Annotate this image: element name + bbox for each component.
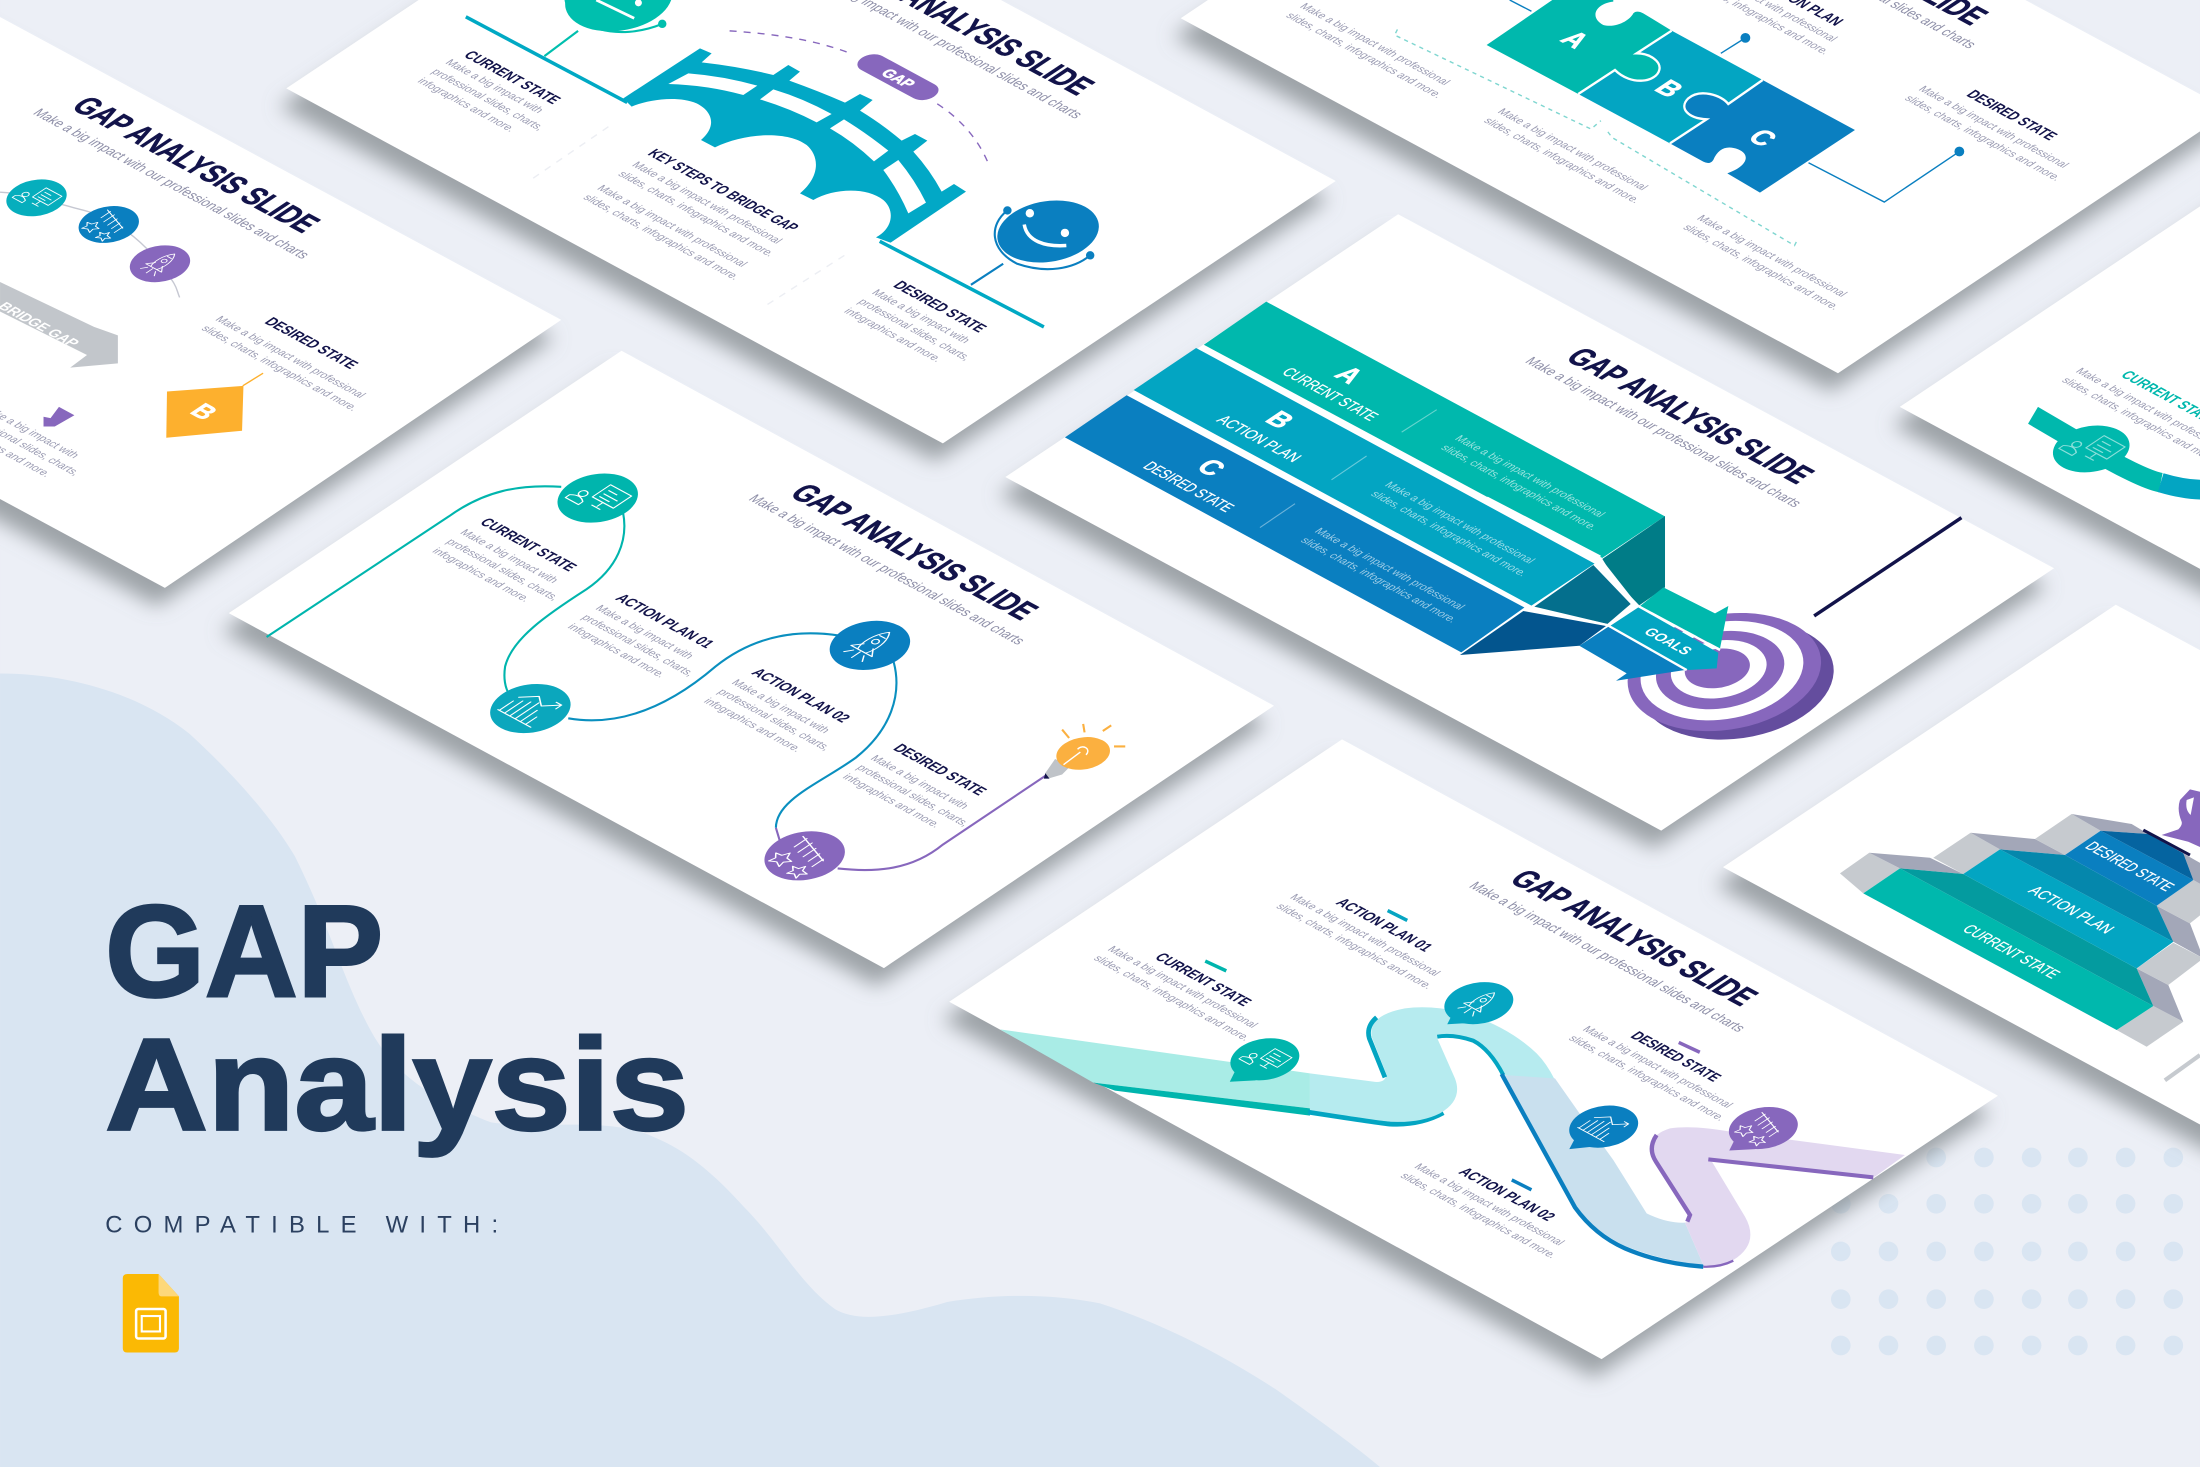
background blob xyxy=(0,673,1381,1467)
arrow heads and sides xyxy=(1460,498,1728,681)
main title: GAP xyxy=(105,878,383,1024)
icon: board circle xyxy=(2037,416,2145,482)
action plan label: ACTION PLAN xyxy=(2024,884,2117,936)
band C top xyxy=(1065,395,1524,652)
desired state text: professional slides, charts, xyxy=(853,763,972,828)
heading: current state: CURRENT STATE xyxy=(460,48,564,107)
connector dots xyxy=(1740,33,1964,156)
heading: desired state: DESIRED STATE xyxy=(889,279,990,335)
current state text: infographics and more. xyxy=(429,547,533,604)
letter B: B xyxy=(1259,407,1301,433)
heading: current state: CURRENT STATE xyxy=(476,516,580,574)
band A text: Make a big impact with professional xyxy=(1452,434,1607,519)
road band xyxy=(2033,415,2161,483)
body text three: Make a big impact with professional xyxy=(1694,214,1850,299)
panel: target slide xyxy=(999,214,2054,849)
band B text: slides, charts, infographics and more. xyxy=(1368,489,1530,579)
action plan 02 text: infographics and more. xyxy=(700,697,804,754)
connector curve xyxy=(0,192,180,297)
heading: target slide title: GAP ANALYSIS SLIDE xyxy=(1558,342,1823,489)
body text two: slides, charts, infographics and more. xyxy=(1480,116,1643,205)
connector xyxy=(243,373,263,386)
pin: current state xyxy=(1216,1030,1314,1089)
icon: stars circle xyxy=(748,821,862,890)
icon: board circle xyxy=(541,464,655,533)
panel: bridge slide xyxy=(279,0,1336,462)
dot pattern xyxy=(1831,1148,2183,1355)
desired state label: DESIRED STATE xyxy=(1139,460,1237,515)
key steps text: Make a big impact with professional xyxy=(594,184,750,269)
stairs xyxy=(1840,814,2200,1047)
current state text: Make a big impact with xyxy=(442,58,546,115)
accent dashes xyxy=(1205,961,1226,971)
icon: B diamond xyxy=(166,386,243,438)
action plan 01 text: infographics and more. xyxy=(564,622,668,680)
panel: right small slide xyxy=(1893,145,2200,779)
desired state text: Make a big impact with xyxy=(869,288,973,345)
heading: action plan 02: ACTION PLAN 02 xyxy=(1454,1165,1559,1224)
icon: board circle xyxy=(0,172,79,224)
current state label: CURRENT STATE xyxy=(1958,923,2063,981)
current state label: CURRENT STATE xyxy=(1277,366,1382,424)
winding line purple xyxy=(776,776,1045,870)
body text one: slides, charts, infographics and more. xyxy=(1283,11,1445,100)
action plan 01 text: Make a big impact with xyxy=(592,604,696,661)
gap pill xyxy=(851,51,944,104)
dividers xyxy=(1260,410,1437,528)
pin: action plan 01 xyxy=(1430,974,1528,1033)
pin: desired state xyxy=(1715,1099,1812,1158)
desired state label: DESIRED STATE xyxy=(2081,840,2178,894)
current state text: professional slides, charts, xyxy=(443,537,562,603)
gap dashed arc xyxy=(730,31,989,166)
heading: action plan 02: ACTION PLAN 02 xyxy=(747,666,854,725)
band A top xyxy=(1204,302,1665,558)
desired state text: Make a big impact with professional xyxy=(1579,1025,1735,1110)
action plan 02 text: slides, charts, infographics and more. xyxy=(1397,1171,1559,1260)
faint dashed dividers xyxy=(533,123,849,304)
icon: google slides xyxy=(123,1274,179,1353)
action plan 02 text: Make a big impact with professional xyxy=(1411,1162,1567,1247)
desired state text: Make a big impact with professional xyxy=(1915,85,2071,170)
icon: trophy xyxy=(2143,789,2200,855)
heading: desired state: DESIRED STATE xyxy=(889,742,990,798)
body text one: Make a big impact with professional xyxy=(1297,2,1452,87)
body text three: slides, charts, infographics and more. xyxy=(1680,223,1842,312)
panel: left slide with A and B states xyxy=(0,0,561,606)
heading: current state: CURRENT STATE xyxy=(1150,951,1255,1009)
panel: road slide xyxy=(942,739,1998,1378)
winding line blue xyxy=(568,633,896,828)
desired state text: Make a big impact with professional xyxy=(212,315,368,400)
heading: action plan 01: ACTION PLAN 01 xyxy=(1331,896,1436,954)
winding slide subtitle: Make a big impact with our professional slides and charts xyxy=(744,492,1028,647)
icon: stars circle xyxy=(66,199,151,250)
desired state text: slides, charts, infographics and more. xyxy=(1901,94,2064,183)
current state text: slides, charts, infographics and more. xyxy=(1090,954,1253,1043)
band A text: slides, charts, infographics and more. xyxy=(1438,443,1600,532)
icon: smiley face xyxy=(971,188,1120,285)
key steps text: Make a big impact with professional xyxy=(629,160,785,246)
key steps text: slides, charts, infographics and more. xyxy=(615,170,777,259)
road band blue xyxy=(2161,483,2200,490)
bridge xyxy=(623,48,966,243)
desired state text: professional slides, charts, xyxy=(855,297,973,363)
grey line xyxy=(2165,1055,2200,1080)
letter C: C xyxy=(1741,125,1784,151)
main title: Analysis xyxy=(105,1011,689,1157)
desired state text: infographics and more. xyxy=(839,772,943,830)
heading: desired state: DESIRED STATE xyxy=(1626,1029,1725,1084)
band B top xyxy=(1134,348,1595,606)
desired state text: slides, charts, infographics and more. xyxy=(198,324,361,413)
band C text: Make a big impact with professional xyxy=(1311,526,1467,612)
band C text: slides, charts, infographics and more. xyxy=(1297,536,1460,625)
desired state text: Make a big impact with xyxy=(867,754,971,811)
key steps text: slides, charts, infographics and more. xyxy=(580,193,742,282)
heading: desired state: DESIRED STATE xyxy=(1962,88,2061,143)
letter A: A xyxy=(1554,26,1596,53)
gap label: GAP xyxy=(877,66,919,91)
action plan 01 text: slides, charts, infographics and more. xyxy=(1273,902,1435,991)
action plan 02 text: Make a big impact with xyxy=(728,678,832,735)
icon: chart circle xyxy=(474,674,587,743)
desired state text: infographics and more. xyxy=(841,307,945,364)
action plan 02 text: professional slides, charts, xyxy=(714,687,833,753)
panel: stairs slide xyxy=(1716,605,2200,1239)
letter B: B xyxy=(184,400,223,424)
icon: rocket circle xyxy=(117,238,203,290)
heading: road slide title: GAP ANALYSIS SLIDE xyxy=(1502,864,1766,1011)
letter A: A xyxy=(1328,362,1370,388)
current state text: Make a big impact with xyxy=(457,528,561,585)
action plan label: ACTION PLAN xyxy=(1212,413,1305,465)
body text two: Make a big impact with professional xyxy=(1494,107,1650,192)
goals label: GOALS xyxy=(1639,626,1695,658)
dashed guides xyxy=(1395,29,1797,246)
winding road xyxy=(1000,1007,1905,1267)
arrow: bridge gap xyxy=(0,282,118,368)
icon: small purple arrow xyxy=(44,407,74,427)
action plan 01 text: Make a big impact with professional xyxy=(1287,893,1443,978)
current state text: professional slides, charts, xyxy=(428,67,547,133)
compatible with label: COMPATIBLE WITH: xyxy=(105,1212,498,1239)
winding line teal xyxy=(267,486,624,706)
heading: key steps: KEY STEPS TO BRIDGE GAP xyxy=(643,147,802,234)
heading: winding slide title: GAP ANALYSIS SLIDE xyxy=(782,478,1047,625)
current state text: infographics and more. xyxy=(414,77,518,134)
road slide subtitle: Make a big impact with our professional slides and charts xyxy=(1465,880,1749,1035)
connector lines xyxy=(1510,0,1959,202)
icon: rocket circle xyxy=(813,611,927,680)
left ground line xyxy=(466,17,627,102)
target slide subtitle: Make a big impact with our professional slides and charts xyxy=(1521,355,1805,510)
desired state text: slides, charts, infographics and more. xyxy=(1565,1034,1728,1123)
icon: neutral face xyxy=(543,0,695,56)
letter B: B xyxy=(1648,76,1690,102)
target xyxy=(1588,589,1874,763)
puzzle xyxy=(1487,0,1855,193)
heading: left slide title: GAP ANALYSIS SLIDE xyxy=(64,91,328,238)
band B text: Make a big impact with professional xyxy=(1381,480,1537,566)
panel: puzzle slide xyxy=(1174,0,2200,391)
right ground line xyxy=(880,241,1044,327)
left slide subtitle: Make a big impact with our professional slides and charts xyxy=(29,107,313,262)
pin: action plan 02 xyxy=(1555,1097,1652,1156)
action plan 01 text: professional slides, charts, xyxy=(578,613,697,678)
panel: winding path slide xyxy=(222,351,1274,986)
heading: action plan 01: ACTION PLAN 01 xyxy=(611,591,718,651)
main title xyxy=(105,878,689,1157)
letter C: C xyxy=(1190,454,1232,481)
heading: desired state: DESIRED STATE xyxy=(260,315,362,372)
icon: light bulb xyxy=(1044,724,1125,779)
current state text: Make a big impact with professional xyxy=(1104,945,1260,1030)
target string xyxy=(1814,518,1961,616)
